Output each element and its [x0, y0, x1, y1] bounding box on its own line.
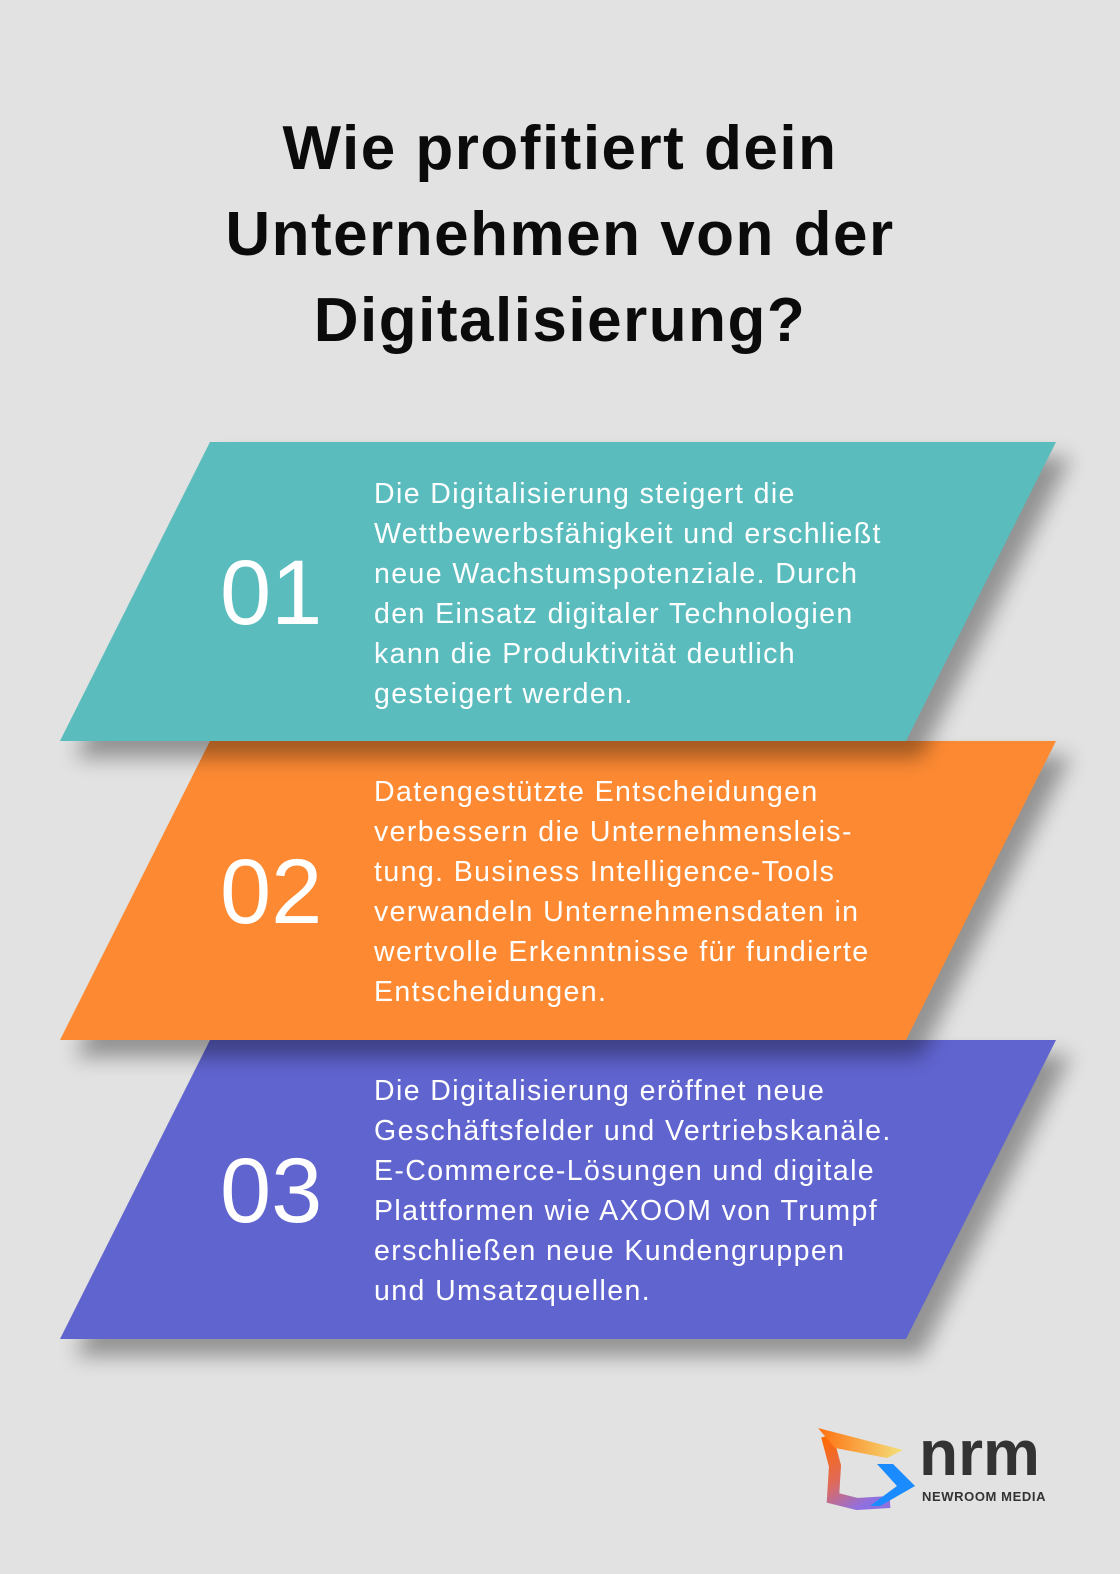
text 03: [374, 1075, 892, 1307]
text 01: kann die Produktivität deutlich: [374, 638, 796, 670]
logo: NEWROOM MEDIA: [922, 1489, 1046, 1504]
title: [225, 114, 895, 355]
text 02: verwandeln Unternehmensdaten in: [374, 896, 859, 928]
text 01: neue Wachstumspotenziale. Durch: [374, 558, 858, 590]
text 01: gesteigert werden.: [374, 678, 634, 710]
text 02: [374, 776, 870, 1008]
text 03: erschließen neue Kundengruppen: [374, 1235, 845, 1267]
text 03: Die Digitalisierung eröffnet neue: [374, 1075, 825, 1107]
text 01: [374, 478, 882, 710]
icon: nrm mark: [818, 1428, 915, 1510]
text 03: Geschäftsfelder und Vertriebskanäle.: [374, 1115, 892, 1147]
wordmark: nrm: [919, 1417, 1040, 1489]
panel: 03: [220, 1075, 892, 1307]
text 01: Die Digitalisierung steigert die: [374, 478, 796, 510]
text 02: tung. Business Intelligence-Tools: [374, 856, 835, 888]
title: Unternehmen von der: [225, 200, 895, 269]
text 01: Wettbewerbsfähigkeit und erschließt: [374, 518, 882, 550]
panel: 01: [220, 478, 882, 710]
text 02: verbessern die Unternehmensleis-: [374, 816, 853, 848]
text 02: Entscheidungen.: [374, 976, 607, 1008]
logo: [818, 1417, 1046, 1510]
text 02: Datengestützte Entscheidungen: [374, 776, 819, 808]
panel: 02: [220, 776, 870, 1008]
number 02: 02: [220, 841, 322, 943]
text 02: wertvolle Erkenntnisse für fundierte: [374, 936, 870, 968]
title: Digitalisierung?: [314, 286, 806, 355]
text 01: den Einsatz digitaler Technologien: [374, 598, 854, 630]
title: Wie profitiert dein: [283, 114, 837, 183]
text 03: und Umsatzquellen.: [374, 1275, 651, 1307]
number 03: 03: [220, 1140, 322, 1242]
number 01: 01: [220, 542, 322, 644]
text 03: Plattformen wie AXOOM von Trumpf: [374, 1195, 878, 1227]
text 03: E-Commerce-Lösungen und digitale: [374, 1155, 875, 1187]
